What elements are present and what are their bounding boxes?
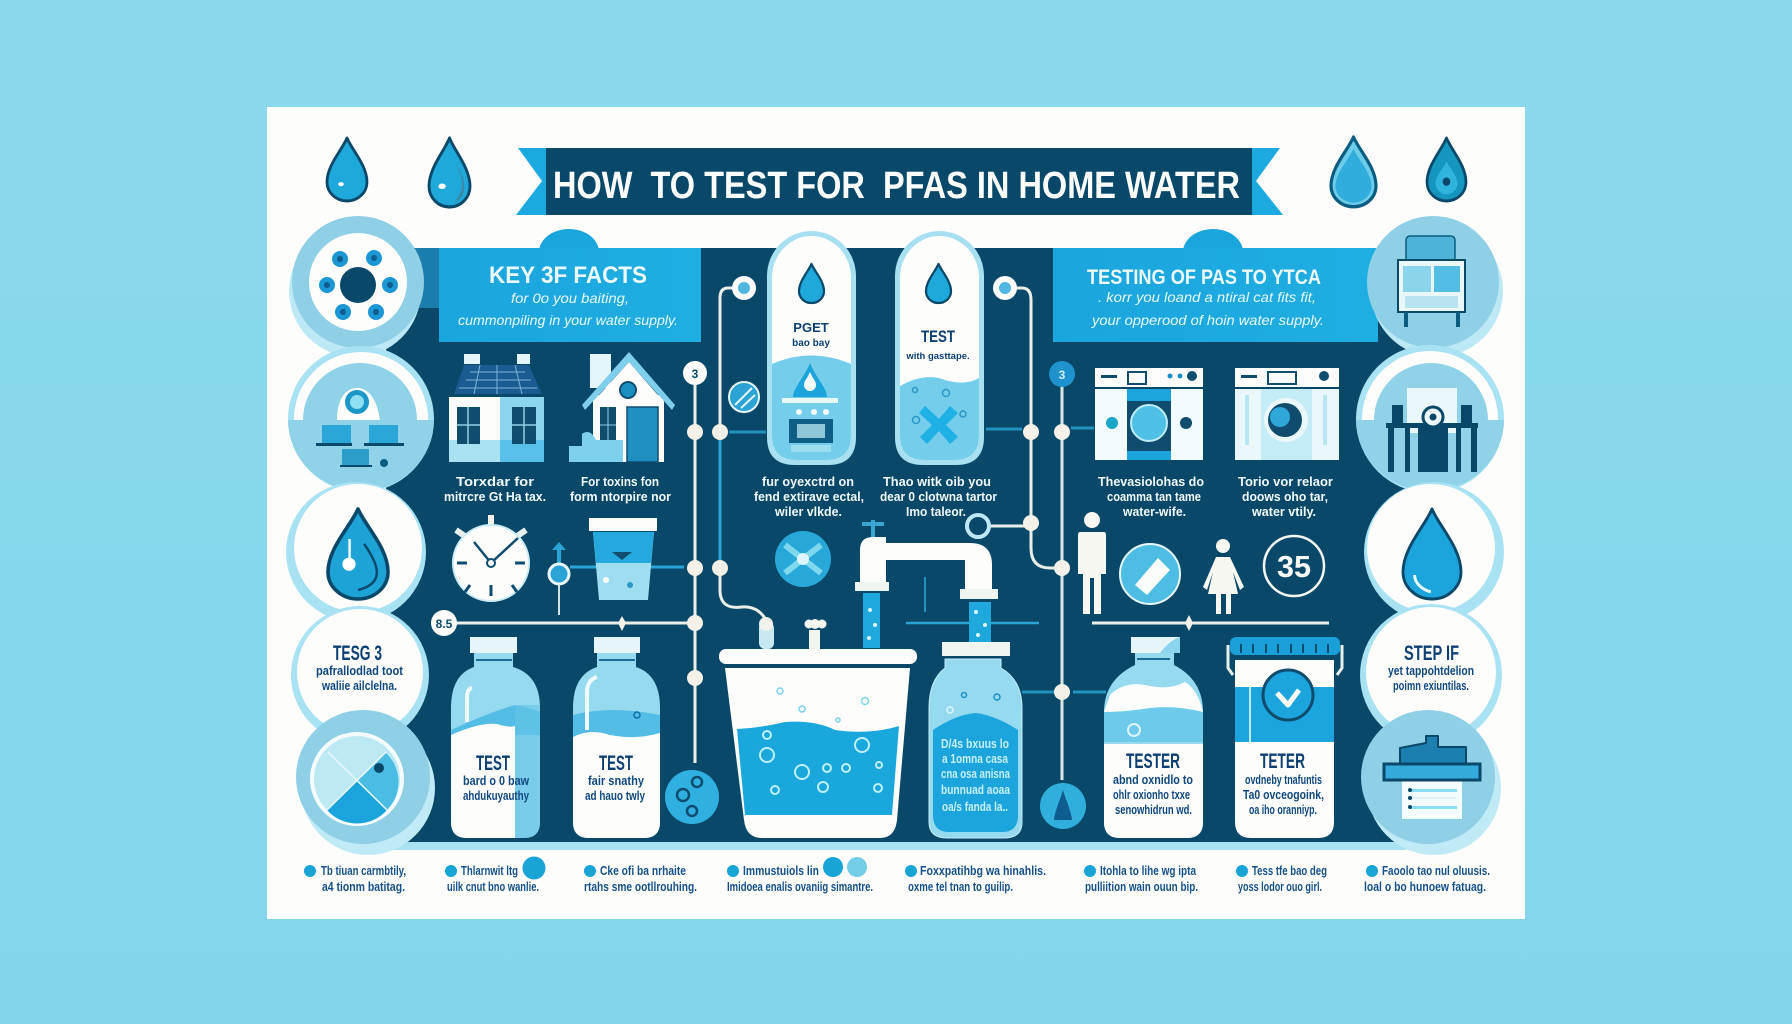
label: ad hauo twly bbox=[585, 789, 645, 803]
icon: drop bbox=[926, 264, 951, 303]
label: TESTER bbox=[1126, 750, 1180, 773]
note 8: loal o bo hunoew fatuag. bbox=[1364, 880, 1486, 894]
note 3: rtahs sme ootllrouhing. bbox=[584, 880, 697, 894]
caption: house 1: Torxdar for bbox=[456, 475, 534, 489]
label: oa/s fanda la.. bbox=[942, 800, 1008, 814]
note 7 bbox=[1236, 864, 1327, 894]
icon: test jar bbox=[1228, 637, 1342, 838]
icon: top left connector ring bbox=[732, 276, 756, 300]
label: D/4s bxuus lo bbox=[941, 737, 1009, 751]
number badge bbox=[431, 610, 457, 636]
icon: cup bbox=[589, 518, 657, 600]
stove icon bbox=[782, 363, 838, 452]
icon: water drop 4 bbox=[1427, 138, 1466, 201]
label: TETER bbox=[1260, 750, 1305, 773]
note 7: Tess tfe bao deg bbox=[1252, 864, 1327, 878]
note 6 bbox=[1084, 864, 1198, 894]
icon: top right connector ring bbox=[993, 276, 1017, 300]
caption: washer 2 bbox=[1238, 475, 1333, 519]
left header bbox=[415, 229, 701, 342]
panel: right text circle 4 bbox=[1360, 604, 1502, 746]
note 2: Thlarnwit ltg bbox=[461, 864, 518, 878]
caption: washer 1: coamma tan tame bbox=[1107, 490, 1201, 504]
icon: left marker 3: 3 bbox=[692, 367, 699, 381]
icon: faucet bbox=[855, 520, 998, 648]
icon: bottle 4 bbox=[1104, 637, 1203, 838]
caption: washer 1 bbox=[1098, 475, 1204, 519]
heading: KEY 3F FACTS bbox=[489, 262, 647, 289]
icon: drop bbox=[799, 264, 824, 303]
note 3 bbox=[584, 864, 697, 894]
panel: right icon circle 1 bbox=[1367, 216, 1503, 357]
caption: capsule 1: fur oyexctrd on bbox=[762, 475, 854, 489]
panel: dark central area bbox=[386, 248, 1406, 850]
icon: washer 2 bbox=[1235, 368, 1339, 460]
capsule 2 bbox=[895, 231, 984, 465]
panel: right icon circle 2 bbox=[1356, 345, 1504, 493]
label: bao bay bbox=[792, 338, 830, 349]
connector pipes bbox=[456, 288, 1329, 780]
icon: clock bbox=[453, 515, 529, 601]
note 2: uilk cnut bno wanlie. bbox=[447, 880, 539, 894]
panel: left icon circle 1 bbox=[289, 216, 424, 357]
note 3: Cke ofi ba nrhaite bbox=[600, 864, 686, 878]
icon: lens circle bbox=[1120, 544, 1180, 604]
number badge: 8.5 bbox=[436, 617, 453, 631]
note 1: a4 tionm batitag. bbox=[322, 880, 405, 894]
icon: drop circle bbox=[1040, 783, 1086, 829]
caption: washer 2: Torio vor relaor bbox=[1238, 475, 1333, 489]
label bbox=[463, 752, 529, 803]
icon: small striped circle bbox=[729, 382, 759, 412]
label bbox=[941, 737, 1011, 814]
icon: molecule circle bbox=[665, 770, 719, 824]
icon: bottle 3 bbox=[929, 642, 1022, 838]
panel: white card bbox=[267, 107, 1525, 919]
caption: washer 2: water vtily. bbox=[1251, 505, 1316, 519]
note 8: Faoolo tao nul oluusis. bbox=[1382, 864, 1490, 878]
note 2 bbox=[445, 856, 546, 894]
heading: TESTING OF PAS TO YTCA bbox=[1087, 266, 1321, 289]
caption: house 2: form ntorpire nor bbox=[570, 490, 671, 504]
right header bbox=[1053, 229, 1378, 342]
panel: left icon circle 2 bbox=[288, 346, 434, 492]
caption: washer 1: Thevasiolohas do bbox=[1098, 475, 1204, 489]
label bbox=[905, 327, 970, 362]
text block: yet tappohtdelion bbox=[1388, 664, 1474, 678]
label: oa iho oranniyp. bbox=[1249, 803, 1317, 817]
label: PGET bbox=[793, 320, 829, 335]
heading: STEP IF bbox=[1404, 642, 1459, 665]
note 1 bbox=[304, 864, 406, 894]
caption: washer 1: water-wife. bbox=[1122, 505, 1186, 519]
label: a 1omna casa bbox=[942, 752, 1009, 766]
text block: waliie ailclelna. bbox=[321, 679, 397, 693]
text block bbox=[1388, 664, 1474, 693]
title: HOW TO TEST FOR PFAS IN HOME WATER bbox=[553, 165, 1240, 207]
text block: for 0o you baiting, bbox=[511, 290, 629, 306]
caption: capsule 1 bbox=[754, 475, 864, 519]
panel: left drop circle 3 bbox=[286, 482, 426, 622]
note 5: Foxxpatihbg wa hinahlis. bbox=[920, 864, 1046, 878]
label bbox=[792, 320, 830, 349]
icon: bottle 1 bbox=[451, 637, 540, 838]
capsule 1 bbox=[767, 231, 856, 465]
caption: capsule 2 bbox=[880, 475, 997, 519]
connector nodes bbox=[618, 424, 1193, 700]
heading: TESG 3 bbox=[333, 642, 382, 665]
text block: cummonpiling in your water supply. bbox=[458, 312, 678, 328]
icon: water drop 2 bbox=[429, 138, 470, 207]
note 4: Imidoea enalis ovaniig simantre. bbox=[727, 880, 873, 894]
caption: house 2 bbox=[570, 475, 671, 504]
note 5: oxme tel tnan to guilip. bbox=[908, 880, 1013, 894]
label: TEST bbox=[476, 752, 510, 775]
caption: house 1 bbox=[444, 475, 546, 504]
icon: man bbox=[1078, 512, 1106, 614]
icon: large drop bbox=[328, 509, 388, 599]
icon: bottle 2 bbox=[573, 637, 660, 838]
icon: left marker 3 bbox=[683, 361, 707, 385]
icon: large drop bbox=[1403, 509, 1461, 599]
label: cna osa anisna bbox=[941, 767, 1011, 781]
icon: water drop 3 bbox=[1331, 137, 1376, 207]
icon: small gauge bbox=[549, 542, 569, 584]
label: ovdneby tnafuntis bbox=[1245, 773, 1322, 787]
icon: circle badge bbox=[775, 531, 831, 587]
label: Ta0 ovceogoink, bbox=[1243, 788, 1324, 802]
label bbox=[1243, 750, 1324, 817]
icon: house 2 bbox=[569, 352, 675, 462]
icon: right marker 3 bbox=[1049, 361, 1075, 387]
panel: left lens circle 5 bbox=[296, 710, 435, 855]
note 5 bbox=[905, 864, 1046, 894]
label bbox=[585, 752, 645, 803]
note 6: Itohla to lihe wg ipta bbox=[1100, 864, 1197, 878]
title ribbon bbox=[516, 148, 1283, 215]
note 7: yoss lodor ouo girl. bbox=[1238, 880, 1322, 894]
text block bbox=[458, 290, 678, 328]
note 6: pulliition wain ouun bip. bbox=[1085, 880, 1198, 894]
label: bard o 0 baw bbox=[463, 774, 529, 788]
label: fair snathy bbox=[588, 774, 644, 788]
text block: your opperood of hoin water supply. bbox=[1091, 312, 1324, 328]
icon: sink basin bbox=[719, 649, 917, 838]
icon: sink taps bbox=[759, 617, 826, 649]
label: TEST bbox=[599, 752, 633, 775]
note 8 bbox=[1364, 864, 1490, 894]
caption: house 1: mitrcre Gt Ha tax. bbox=[444, 490, 546, 504]
label: TEST bbox=[921, 327, 955, 346]
caption: capsule 1: wiler vlkde. bbox=[774, 505, 842, 519]
note 4: Immustuiols lin bbox=[743, 864, 819, 878]
panel: left text circle 4 bbox=[291, 606, 429, 744]
icon: ring connector bbox=[967, 515, 989, 537]
icon: blue X bbox=[919, 406, 958, 444]
label: senowhidrun wd. bbox=[1115, 803, 1192, 817]
text block bbox=[1091, 289, 1324, 328]
caption: capsule 2: Thao witk oib you bbox=[883, 475, 991, 489]
caption: house 2: For toxins fon bbox=[581, 475, 659, 489]
label: ahdukuyauthy bbox=[463, 789, 529, 803]
label bbox=[1113, 750, 1193, 817]
panel: right document circle 5 bbox=[1361, 710, 1501, 855]
icon: water drop 1 bbox=[327, 138, 367, 201]
icon: woman bbox=[1203, 539, 1244, 614]
note 4 bbox=[727, 857, 873, 894]
panel: right drop circle 3 bbox=[1364, 482, 1504, 622]
note 1: Tb tiuan carmbtily, bbox=[321, 864, 406, 878]
caption: capsule 2: Imo taleor. bbox=[906, 505, 966, 519]
caption: capsule 2: dear 0 clotwna tartor bbox=[880, 490, 997, 504]
icon: house 1 bbox=[449, 354, 544, 462]
label: abnd oxnidlo to bbox=[1113, 773, 1193, 787]
text block: pafrallodlad toot bbox=[316, 664, 404, 678]
icon: right marker 3: 3 bbox=[1059, 368, 1066, 382]
text block: . korr you loand a ntiral cat fits fit, bbox=[1098, 289, 1316, 305]
label: bunnuad aoaa bbox=[941, 783, 1011, 797]
label: with gasttape. bbox=[905, 351, 970, 362]
icon: number 35: 35 bbox=[1277, 549, 1311, 584]
footer notes bbox=[304, 856, 1490, 894]
icon: number 35 bbox=[1264, 536, 1324, 596]
caption: washer 2: doows oho tar, bbox=[1242, 490, 1328, 504]
label: ohlr oxionho txxe bbox=[1113, 788, 1190, 802]
caption: capsule 1: fend extirave ectal, bbox=[754, 490, 864, 504]
text block bbox=[316, 664, 404, 693]
text block: poimn exiuntilas. bbox=[1393, 679, 1469, 693]
icon: washer 1 bbox=[1095, 368, 1203, 460]
